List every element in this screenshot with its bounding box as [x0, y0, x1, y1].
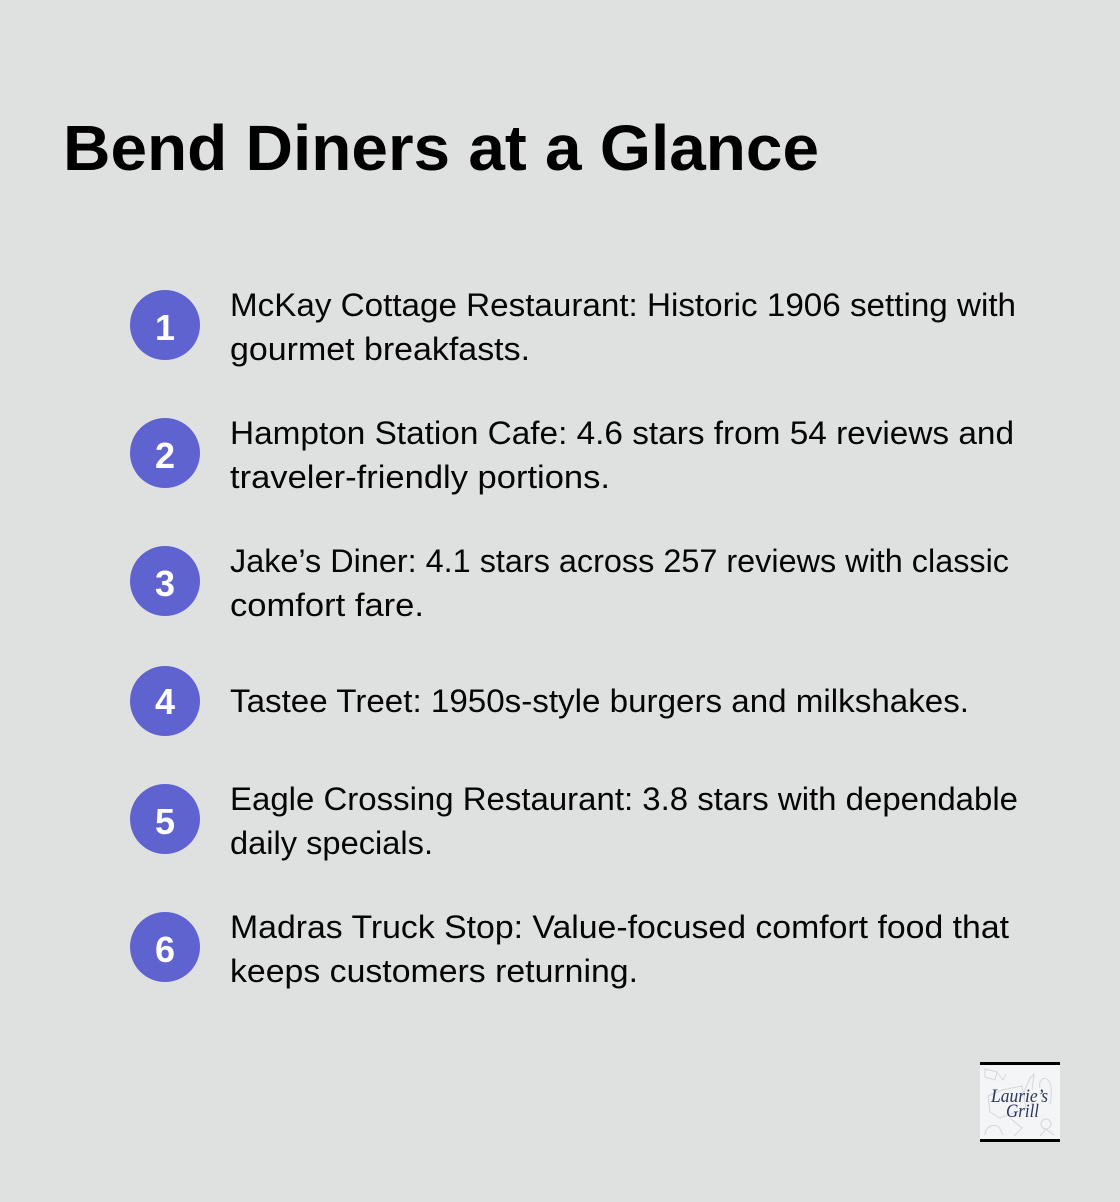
text 3: comfort fare. — [230, 587, 424, 623]
badge 5: 5 — [155, 801, 175, 842]
badge 2 — [130, 418, 200, 488]
text 4: Tastee Treet: 1950s-style burgers and milkshakes. — [230, 683, 969, 719]
text 5: Eagle Crossing Restaurant: 3.8 stars with dependable — [230, 781, 1018, 817]
badge 6: 6 — [155, 929, 175, 970]
logo wordmark: Grill — [1006, 1101, 1039, 1122]
item 5: Eagle Crossing Restaurant — [130, 781, 1018, 861]
badge 4 — [130, 666, 200, 736]
item 2: Hampton Station Cafe — [130, 415, 1014, 495]
badge 3: 3 — [155, 563, 175, 604]
text 6 — [230, 909, 1009, 989]
text 1: gourmet breakfasts. — [230, 331, 530, 367]
item 4: Tastee Treet — [130, 666, 969, 736]
badge 3 — [130, 546, 200, 616]
text 5: daily specials. — [230, 825, 433, 861]
badge 1: 1 — [155, 307, 175, 348]
text 2: traveler-friendly portions. — [230, 459, 610, 495]
text 2 — [230, 415, 1014, 495]
badge 1 — [130, 290, 200, 360]
text 1 — [230, 287, 1016, 367]
text 1: McKay Cottage Restaurant: Historic 1906 setting with — [230, 287, 1016, 323]
text 5 — [230, 781, 1018, 861]
logo wordmark: Laurie’s — [990, 1086, 1048, 1107]
logo: Laurie's Grill — [980, 1062, 1060, 1142]
item 3: Jake's Diner — [130, 543, 1009, 623]
text 3 — [230, 543, 1009, 623]
list of diners — [130, 287, 1018, 989]
item 1: McKay Cottage Restaurant — [130, 287, 1016, 367]
text 6: Madras Truck Stop: Value-focused comfort food that — [230, 909, 1009, 945]
text 6: keeps customers returning. — [230, 953, 638, 989]
badge 5 — [130, 784, 200, 854]
text 2: Hampton Station Cafe: 4.6 stars from 54 reviews and — [230, 415, 1014, 451]
text 3: Jake’s Diner: 4.1 stars across 257 reviews with classic — [230, 543, 1009, 579]
badge 6 — [130, 912, 200, 982]
item 6: Madras Truck Stop — [130, 909, 1009, 989]
title: Bend Diners at a Glance — [63, 112, 819, 184]
badge 2: 2 — [155, 435, 175, 476]
logo wordmark — [990, 1086, 1048, 1122]
badge 4: 4 — [155, 681, 175, 722]
